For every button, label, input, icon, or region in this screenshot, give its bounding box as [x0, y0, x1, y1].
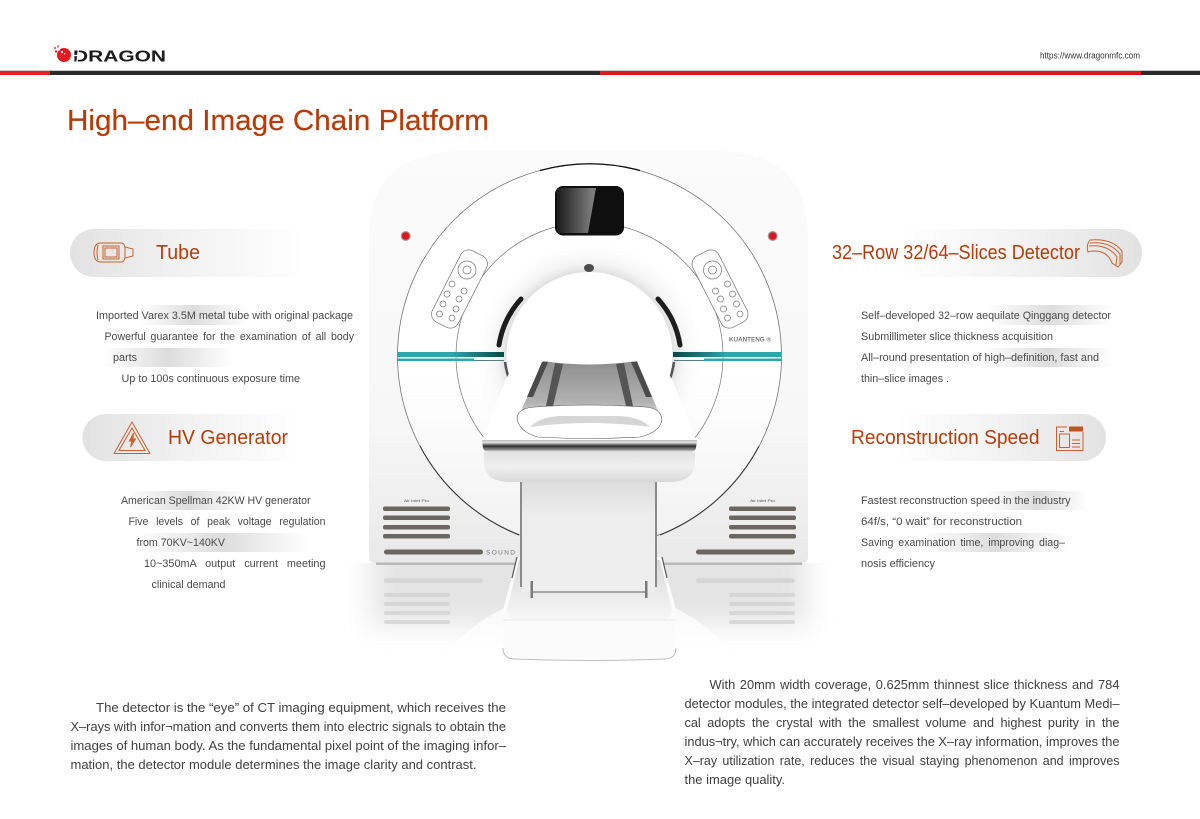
bore opening [506, 272, 672, 438]
table recess [517, 361, 662, 420]
outer ring disc [398, 164, 782, 548]
header: logo [54, 46, 166, 66]
text: HV generator features: clinical demand [152, 579, 226, 591]
air inlet left [383, 498, 515, 556]
text: reconstruction features: Fastest reconstruction speed in the industry [861, 495, 1071, 507]
text: reconstruction features: Saving examination time, improving diag– [861, 537, 1066, 549]
paragraph: detector specifications: detector modules, the integrated detector self–developed by Kuantum Medi– [684, 696, 1120, 711]
paragraph: detector as the eye: The detector is the “eye” of CT imaging equipment, which receives the [96, 700, 506, 715]
paragraph: detector specifications: cal adopts the crystal with the smallest volume and highest purity in the [684, 715, 1120, 730]
text: HV generator features: Five levels of peak voltage regulation [128, 516, 326, 528]
heading: HV Generator: HV Generator [168, 427, 288, 449]
inner ring [456, 222, 723, 490]
icon: x-ray tube [94, 243, 133, 262]
headrest [517, 405, 662, 438]
paragraph: detector specifications [684, 677, 1120, 787]
teal band right [673, 352, 781, 361]
pill: tube heading [70, 229, 305, 277]
website url: https://www.dragonmfc.com [1040, 50, 1140, 60]
paragraph: detector as the eye [70, 700, 507, 772]
table pedestal [520, 482, 657, 598]
pill: reconstruction heading [851, 414, 1106, 461]
text: reconstruction features: 64f/s, “0 wait” for reconstruction [861, 516, 1022, 528]
text: detector features: All–round presentation of high–definition, fast and [861, 352, 1099, 364]
text: tube features [96, 305, 354, 385]
paragraph: detector specifications: X–ray utilization rate, reduces the visual staying phenomenon and improves [684, 753, 1120, 768]
air inlet left: SOUND [486, 550, 515, 556]
text: tube features: Powerful guarantee for the examination of all body [104, 331, 354, 343]
text: HV generator features [121, 491, 326, 591]
air inlet left: Air inlet Pro [404, 498, 430, 503]
icon: image reconstruction window [1056, 426, 1083, 450]
brand label: KUANTENG ® [729, 336, 772, 344]
camera dot [584, 264, 594, 272]
table top [482, 362, 696, 440]
text: tube features: parts [113, 352, 137, 364]
text: detector features: thin–slice images . [861, 373, 949, 385]
pill: HV generator heading [82, 414, 300, 461]
dark side slots [499, 299, 680, 345]
text: tube features: Imported Varex 3.5M metal tube with original package [96, 310, 353, 322]
control panel left [428, 247, 491, 331]
display screen [555, 186, 624, 236]
icon: curved detector [1087, 240, 1122, 267]
header rule [0, 70, 1200, 75]
text: detector features: Submillimeter slice thickness acquisition [861, 331, 1053, 343]
table underside [484, 452, 695, 482]
paragraph: detector specifications: With 20mm width coverage, 0.625mm thinnest slice thickness and 784 [710, 677, 1120, 692]
air inlet right [696, 498, 796, 554]
paragraph: detector as the eye: mation, the detector module determines the image clarity and contrast. [70, 757, 476, 772]
title: High–end Image Chain Platform [67, 105, 489, 137]
bore lower rim [505, 362, 674, 384]
heading: Reconstruction Speed: Reconstruction Speed [851, 427, 1040, 449]
text: tube features: Up to 100s continuous exposure time [122, 373, 300, 385]
paragraph: detector specifications: indus¬try, which can accurately receives the X–ray information, improves the [684, 734, 1120, 749]
red indicator right [768, 231, 778, 241]
teal band left [397, 352, 504, 361]
text: reconstruction features [861, 491, 1087, 570]
paragraph: detector as the eye: X–rays with infor¬mation and converts them into electric signals to obtain the [70, 719, 506, 734]
air inlet right: Air inlet Pro [750, 498, 776, 503]
heading: 32-Row 32/64-Slices Detector: 32–Row 32/64–Slices Detector [832, 242, 1080, 264]
logo wordmark: DRAGON [73, 48, 166, 66]
heading: Tube: Tube [156, 242, 200, 264]
text: HV generator features: from 70KV~140KV [136, 537, 226, 549]
paragraph: detector specifications: the image quality. [684, 772, 785, 787]
logo mark: red ball with pixel dots [54, 46, 71, 62]
patient table base [503, 557, 676, 660]
red indicator left [401, 231, 411, 241]
table chrome edge [482, 440, 697, 452]
text: detector features: Self–developed 32–row aequilate Qinggang detector [861, 310, 1111, 322]
paragraph: detector as the eye: images of human body. As the fundamental pixel point of the imaging infor– [70, 738, 507, 753]
bore shadow [474, 239, 706, 471]
control panel right [689, 247, 751, 331]
text: HV generator features: American Spellman 42KW HV generator [121, 495, 311, 507]
icon: high voltage triangle [114, 422, 150, 454]
CT scanner illustration [369, 150, 808, 700]
text: detector features [861, 305, 1113, 385]
gantry body [369, 150, 808, 563]
pill: detector heading [832, 229, 1142, 277]
floor and reflection [365, 563, 813, 632]
text: HV generator features: 10~350mA output current meeting [144, 558, 326, 570]
text: reconstruction features: nosis efficiency [861, 558, 935, 570]
